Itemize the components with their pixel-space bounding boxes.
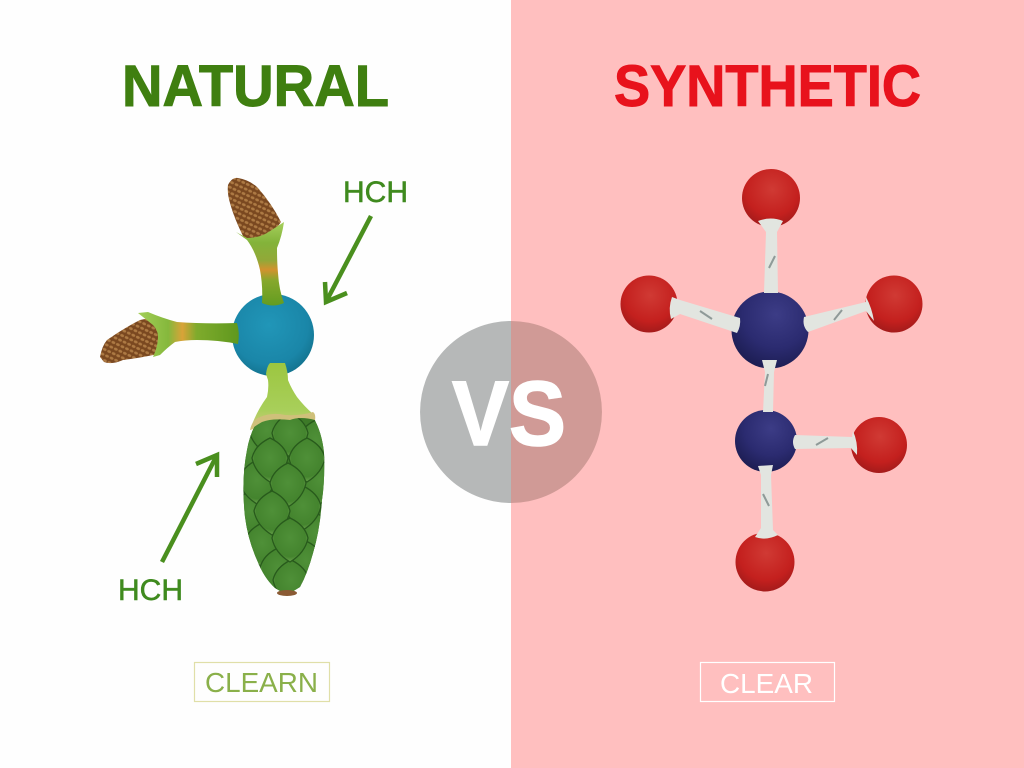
button: CLEARN: CLEARN (205, 667, 318, 698)
button: CLEAR (700, 662, 834, 702)
background: natural side (0, 0, 511, 768)
red atom: right (866, 276, 922, 332)
plant molecule illustration (100, 178, 338, 604)
background: synthetic side (511, 0, 1024, 768)
top stem (236, 222, 284, 306)
synthetic molecule illustration (620, 169, 922, 592)
bonds (670, 218, 874, 539)
label: top HCH: HCH (343, 176, 408, 209)
button: CLEAR: CLEAR (720, 668, 813, 699)
VS badge (420, 321, 602, 503)
bottom stem (250, 363, 313, 430)
red atom: left (620, 276, 678, 332)
red atom: bottom (736, 532, 794, 592)
cone tip (277, 590, 297, 596)
arrow: top HCH (325, 216, 371, 302)
left brown cone (100, 318, 162, 363)
blue central atom (232, 294, 314, 376)
cone collar (250, 412, 315, 430)
label: bottom HCH: HCH (118, 574, 183, 607)
arrow: bottom HCH (162, 455, 217, 562)
green pine cone (243, 417, 324, 591)
VS text: VS (452, 363, 566, 465)
bond marks (700, 256, 842, 506)
left stem (138, 312, 239, 357)
navy atom: lower (735, 410, 797, 472)
red atom: lower right (851, 417, 907, 473)
red atom: top (742, 169, 800, 227)
top brown cone (228, 178, 281, 240)
badge circle: right half (511, 321, 602, 503)
badge circle: left half (420, 321, 511, 503)
navy atom: upper (732, 292, 808, 368)
button: CLEARN (194, 662, 330, 702)
heading: natural: NATURAL (122, 54, 389, 119)
heading: synthetic: SYNTHETIC (614, 54, 921, 119)
